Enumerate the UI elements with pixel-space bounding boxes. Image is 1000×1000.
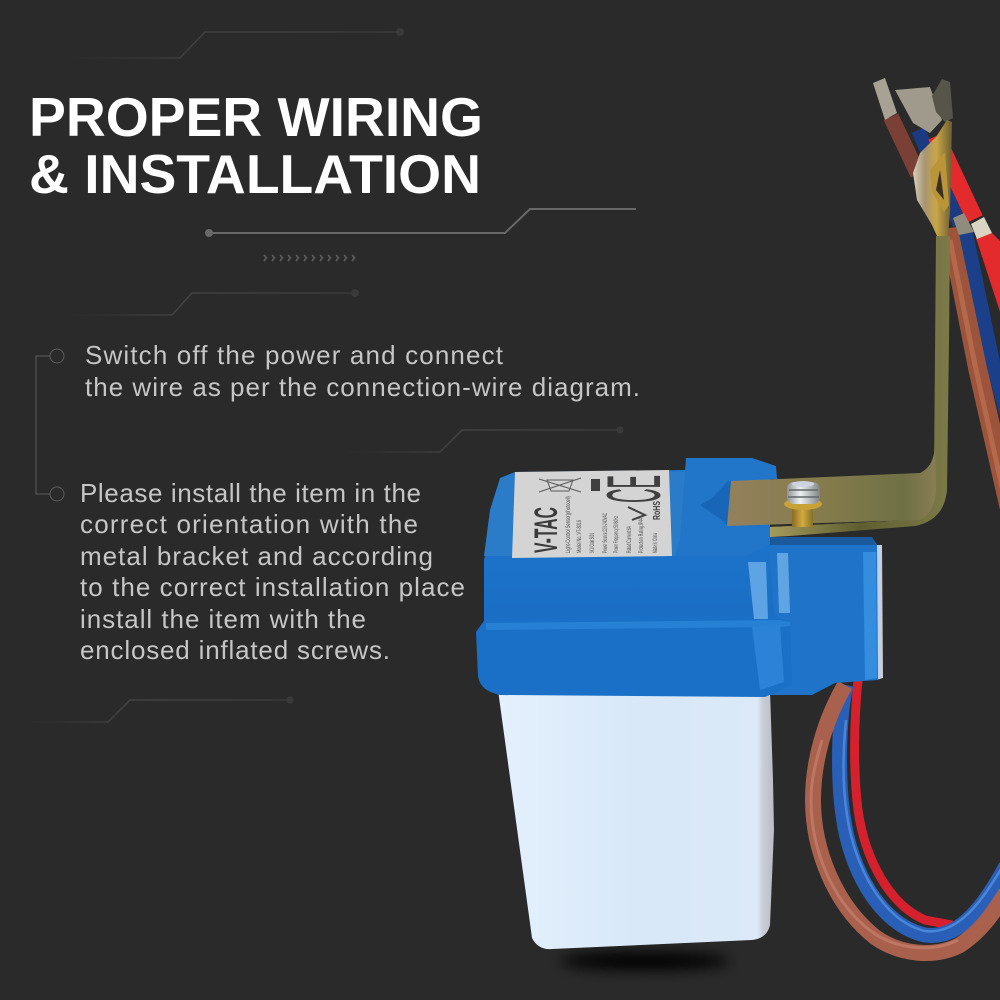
circuit line: lower — [25, 696, 294, 722]
rear block highlight strips — [777, 553, 790, 613]
brown wire top — [891, 117, 918, 174]
bare strands: blue — [953, 213, 974, 235]
step 2 text — [80, 478, 465, 665]
red wire upper — [936, 136, 975, 219]
bracket tip — [932, 79, 953, 122]
rear block shadow under bracket — [770, 537, 876, 545]
step 2 text: metal bracket and according — [80, 541, 433, 571]
circuit line: under title — [205, 209, 636, 237]
top face left — [484, 472, 685, 556]
circuit line: above first step — [65, 289, 359, 315]
red wire lower — [976, 233, 1000, 318]
pale side edge — [876, 545, 883, 680]
spec text: Power Frequency:50/60Hz — [614, 516, 620, 553]
circuit line: between steps — [345, 426, 624, 452]
bare strands: red — [971, 217, 992, 239]
tab recess — [700, 481, 731, 526]
brown loop — [813, 685, 1000, 953]
brown wire lower — [950, 228, 1000, 520]
step 2 text: Please install the item in the — [80, 478, 421, 508]
bracket twisted top — [913, 120, 952, 236]
chevron row — [264, 255, 354, 261]
title — [29, 86, 483, 205]
blue housing — [476, 458, 883, 697]
blue wire top — [918, 130, 960, 225]
cast shadow — [560, 952, 730, 970]
vertical arm — [770, 236, 950, 537]
step 2 text: to the correct installation place — [80, 572, 465, 602]
product label: V-TAC — [528, 507, 564, 553]
spec text — [566, 496, 659, 553]
spec text: SKU Code:5091 — [590, 533, 596, 553]
check mark — [628, 507, 645, 520]
corner highlight: lower lip — [752, 625, 784, 690]
spec text: Model No.:VT-8016 — [577, 520, 583, 553]
step 1 text: the wire as per the connection-wire diagram. — [85, 372, 640, 402]
side edge — [770, 520, 920, 537]
bare strands: centre tuft — [895, 87, 942, 133]
step 1 text: Switch off the power and connect — [85, 340, 504, 370]
spec text: Light-Control Sensor(photocell) — [566, 496, 572, 553]
mounting tab — [675, 458, 777, 556]
infographic canvas: CE — [592, 475, 677, 503]
RoHS mark: RoHS — [652, 501, 663, 520]
step 2 text: enclosed inflated screws. — [80, 635, 390, 665]
spec text: Made in China — [653, 533, 659, 553]
plate — [727, 445, 936, 526]
blue wire lower — [966, 233, 1000, 420]
title: PROPER WIRING — [29, 86, 483, 148]
step 2 text: correct orientation with the — [80, 509, 418, 539]
lip highlight — [486, 620, 790, 630]
title: & INSTALLATION — [29, 143, 481, 205]
spec text: Rated Current:6A — [627, 526, 633, 553]
step 2 text: install the item with the — [80, 604, 366, 634]
circuit line: top — [70, 28, 404, 58]
spec text: Protection Rating:IP44 — [639, 518, 645, 553]
bar mark — [591, 479, 600, 491]
product label — [512, 470, 677, 558]
recycling symbol — [539, 478, 581, 492]
main body lower lip — [476, 616, 792, 697]
wires: upper bundle — [873, 78, 1000, 520]
blue loop — [840, 685, 1000, 935]
translucent white dome — [498, 690, 774, 949]
spec text: Power Source:220-240VAC — [603, 513, 609, 553]
bracket arm and plate — [727, 236, 950, 537]
step 1 text — [85, 340, 640, 402]
screw — [784, 481, 822, 527]
red loop — [855, 680, 952, 925]
main body upper band — [484, 470, 775, 624]
connector with step markers — [36, 349, 64, 501]
bare strands: brown — [873, 78, 897, 120]
rear block — [760, 537, 878, 695]
corner highlight: upper band — [748, 562, 768, 619]
wires: lower loop — [811, 680, 1000, 953]
